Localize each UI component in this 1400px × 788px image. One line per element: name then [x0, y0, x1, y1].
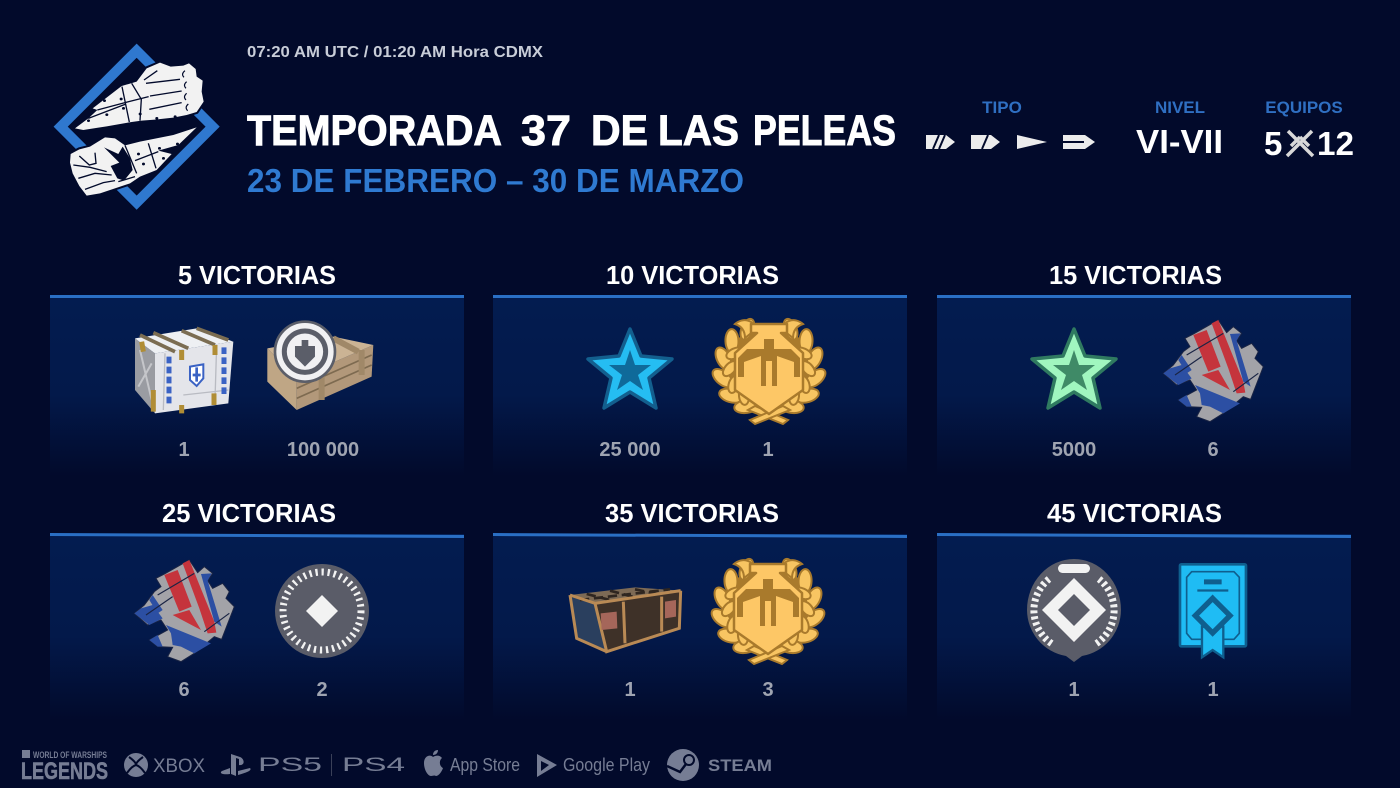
icon: gold medal [709, 317, 829, 424]
title [247, 107, 896, 155]
info: nivel: VI-VII [1136, 123, 1223, 160]
icons: ship types [926, 135, 1095, 149]
icon: crossed swords [1287, 131, 1313, 156]
info: tipo [926, 98, 1095, 149]
logo: google play: Google Play [563, 755, 650, 775]
info: nivel [1136, 98, 1223, 160]
info: tipo: TIPO [982, 98, 1022, 117]
icon: dark wooden crate [570, 587, 681, 652]
value: 6 [178, 679, 190, 701]
icon: flag patch [134, 560, 234, 662]
logo: world of warships legends: LEGENDS [21, 758, 108, 785]
logo: google play [537, 754, 650, 777]
icon: green star [1032, 329, 1116, 408]
icon: silver medal [1027, 559, 1121, 662]
panel: 25 victorias: 25 VICTORIAS [162, 498, 336, 528]
title: PELEAS [753, 107, 896, 155]
value: 1 [1207, 679, 1219, 701]
panel: 35 victorias [493, 498, 907, 720]
logo: xbox: XBOX [153, 756, 205, 777]
panel: 5 victorias [50, 260, 464, 476]
panel: 5 victorias: 5 VICTORIAS [178, 260, 336, 290]
value: 3 [762, 679, 774, 701]
logo: world of warships legends: WORLD OF WARSHIPS [33, 750, 107, 760]
panel: 10 victorias: 10 VICTORIAS [606, 260, 779, 290]
value: 1 [1068, 679, 1080, 701]
value: 25 000 [599, 439, 661, 461]
logo: playstation 4: PS4 [342, 755, 406, 776]
panel: 10 victorias [493, 260, 907, 476]
logo: steam: STEAM [708, 756, 772, 775]
title: DE [591, 107, 648, 155]
title: LAS [658, 107, 739, 155]
panel: 15 victorias [937, 260, 1351, 476]
icon: blue star [588, 329, 672, 408]
logo: playstation 5: PS5 [258, 755, 322, 776]
time line: 07:20 AM UTC / 01:20 AM Hora CDMX [247, 44, 543, 61]
value: 1 [624, 679, 636, 701]
info: equipos: EQUIPOS [1265, 98, 1343, 117]
value: 1 [762, 439, 774, 461]
logo: gauntlets in diamond [61, 51, 213, 203]
date range: 23 DE FEBRERO – 30 DE MARZO [247, 162, 744, 199]
title: 37 [521, 107, 571, 155]
logo: steam [667, 749, 772, 781]
logo: playstation 5 [221, 754, 322, 776]
logo: world of warships legends [21, 750, 108, 785]
icon: gold medal [708, 557, 828, 664]
value: 2 [316, 679, 328, 701]
icon: credits crate [267, 322, 373, 410]
panel: 45 victorias [937, 498, 1351, 720]
info: nivel: NIVEL [1155, 98, 1205, 117]
info: equipos: 5 [1264, 125, 1282, 162]
divider [331, 754, 332, 776]
logo: xbox [124, 753, 205, 777]
icon: certificate [1180, 564, 1246, 657]
title: TEMPORADA [247, 107, 502, 155]
panel: 35 victorias: 35 VICTORIAS [605, 498, 779, 528]
panel: 15 victorias: 15 VICTORIAS [1049, 260, 1222, 290]
icon: white container [135, 328, 233, 413]
panel: 45 victorias: 45 VICTORIAS [1047, 498, 1222, 528]
icon: grey coin [275, 564, 369, 658]
value: 5000 [1052, 439, 1096, 461]
value: 6 [1207, 439, 1219, 461]
panel: 25 victorias [50, 498, 464, 720]
value: 1 [178, 439, 190, 461]
value: 100 000 [287, 439, 359, 461]
icon: flag patch [1163, 320, 1263, 422]
info: equipos [1264, 98, 1354, 162]
logo: app store: App Store [450, 755, 520, 775]
info: equipos: 12 [1317, 125, 1354, 162]
logo: app store [424, 750, 520, 776]
footer: platforms [21, 749, 772, 785]
